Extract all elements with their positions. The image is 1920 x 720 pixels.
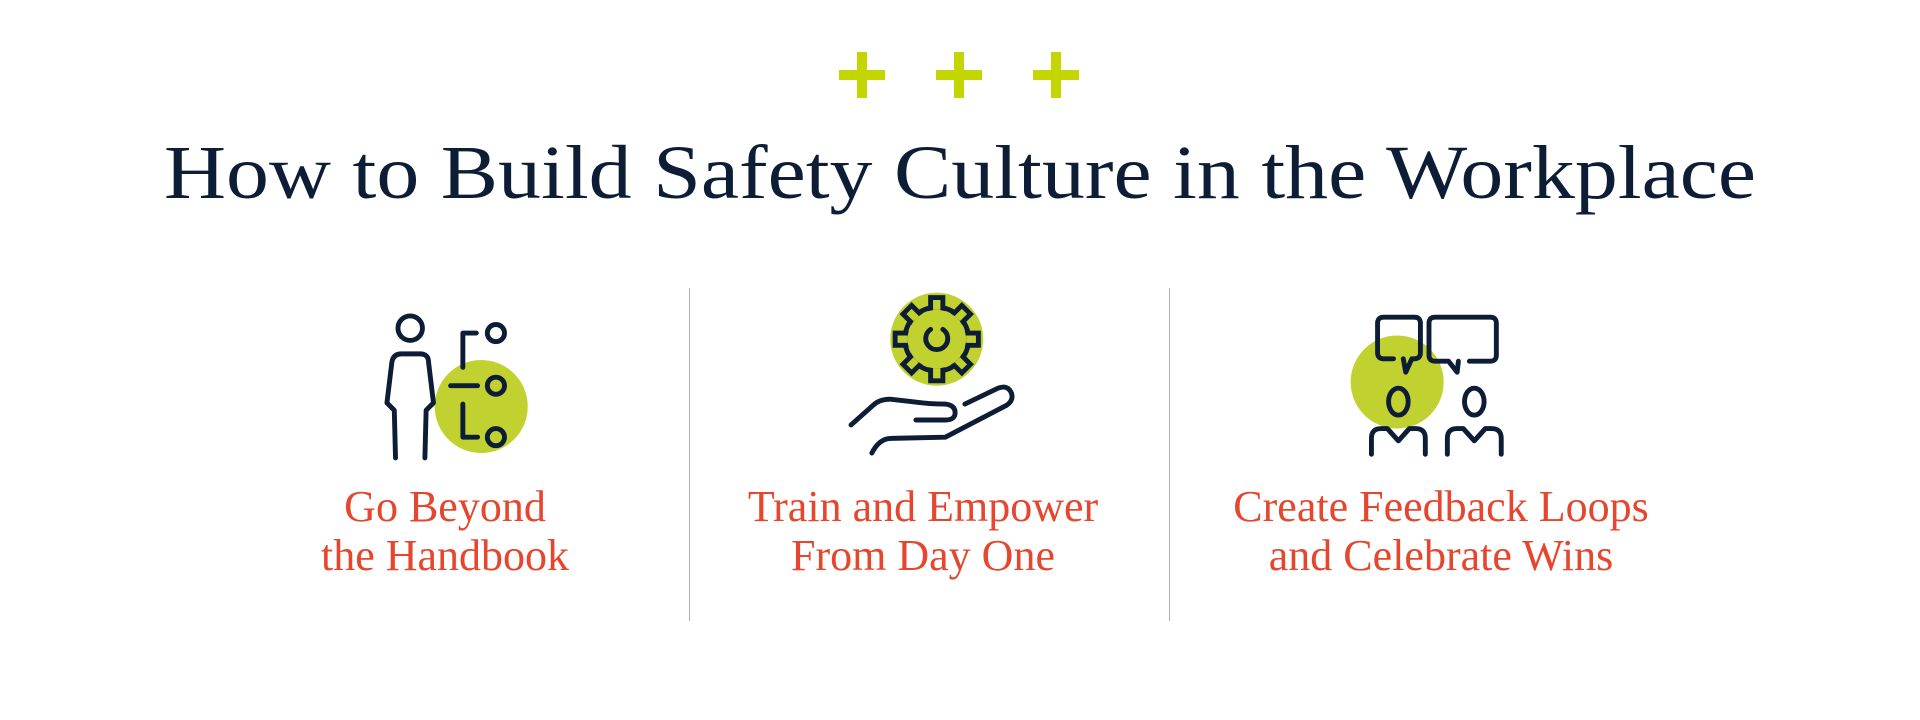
label: feedback loops: Create Feedback Loops xyxy=(1233,482,1649,531)
label: go beyond the handbook: Go Beyond xyxy=(344,482,546,531)
label: go beyond the handbook xyxy=(321,482,569,580)
dividers xyxy=(689,288,690,621)
icon: feedback people xyxy=(1351,317,1501,454)
label: feedback loops: and Celebrate Wins xyxy=(1269,531,1613,580)
label: train and empower: From Day One xyxy=(791,531,1055,580)
icon: gear on hand xyxy=(851,293,1012,453)
label: train and empower: Train and Empower xyxy=(748,482,1098,531)
label: go beyond the handbook: the Handbook xyxy=(321,531,569,580)
label: train and empower xyxy=(748,482,1098,580)
icon: person with connections xyxy=(387,316,528,458)
label: feedback loops xyxy=(1233,482,1649,580)
title: How to Build Safety Culture in the Workplace xyxy=(164,131,1756,215)
decorative plus signs xyxy=(839,52,1079,98)
